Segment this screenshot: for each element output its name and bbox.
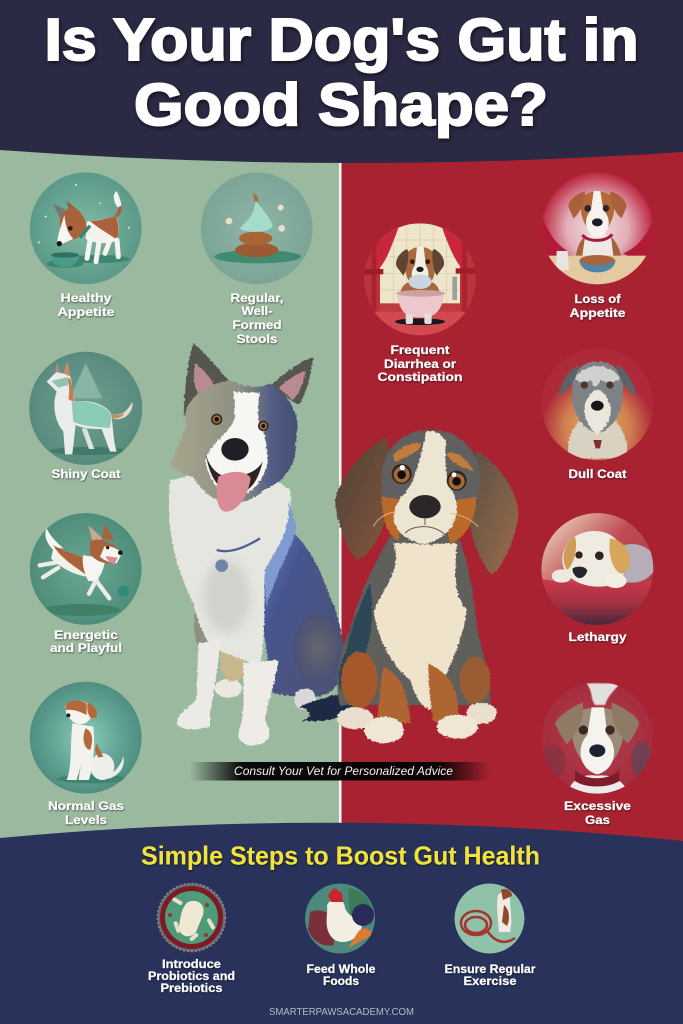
healthy dog illustration [169, 343, 343, 745]
sad dog face details [373, 464, 478, 535]
label: probiotics [148, 959, 235, 995]
label: regular stools [230, 293, 284, 346]
label: lethargy: Lethargy [568, 632, 627, 644]
icon: normal gas dog [30, 682, 142, 794]
icon: well-formed stool [201, 172, 313, 284]
label: frequent diarrhea or constipation: Constipation [378, 372, 462, 384]
label: energetic and playful: and Playful [50, 643, 122, 655]
header band [0, 0, 683, 163]
icon: probiotics [158, 884, 226, 952]
icon: excessive gas dog [541, 682, 653, 798]
label: healthy appetite: Healthy [60, 293, 112, 305]
label: exercise [444, 964, 536, 988]
title: Is Your Dog's Gut in [44, 7, 638, 73]
label: healthy appetite: Appetite [58, 307, 114, 319]
panel: healthy signs background [0, 140, 340, 850]
label: healthy appetite [58, 293, 114, 319]
label: whole foods: Feed Whole [306, 964, 376, 976]
label: whole foods: Foods [323, 976, 359, 988]
label: regular stools: Regular, [230, 293, 284, 305]
label: probiotics: Probiotics and [148, 971, 235, 983]
icon: frequent diarrhea dog in tub [362, 223, 478, 338]
icon: shiny coat dog [29, 352, 142, 465]
footer band [0, 823, 683, 1024]
healthy dog face details [206, 414, 269, 572]
callout: consult your vet [190, 762, 490, 780]
website credit: SMARTERPAWSACADEMY.COM [269, 1006, 414, 1018]
label: probiotics: Prebiotics [160, 983, 222, 995]
icon: whole foods [305, 884, 375, 954]
label: normal gas levels: Normal Gas [48, 801, 124, 813]
label: regular stools: Formed [232, 320, 282, 332]
label: whole foods [306, 964, 376, 988]
label: energetic and playful: Energetic [54, 630, 119, 642]
label: excessive gas [564, 801, 631, 827]
icon: energetic dog [30, 513, 142, 625]
label: excessive gas: Gas [585, 815, 610, 827]
label: loss of appetite: Appetite [570, 308, 626, 320]
label: excessive gas: Excessive [564, 801, 631, 813]
icon: loss of appetite dog [538, 172, 658, 286]
sad dog illustration [300, 430, 518, 743]
label: exercise: Ensure Regular [444, 964, 536, 976]
label: frequent diarrhea or constipation: Diarrhea or [384, 359, 457, 371]
icon: healthy appetite dog [30, 172, 142, 284]
label: probiotics: Introduce [162, 959, 221, 971]
label: energetic and playful [50, 630, 122, 655]
title [44, 7, 638, 138]
icon: dull coat dog [543, 360, 652, 460]
label: loss of appetite: Loss of [574, 294, 621, 306]
icon: exercise leash and dog [454, 884, 524, 954]
callout: consult your vet: Consult Your Vet for Personalized Advice [234, 764, 453, 778]
label: shiny coat: Shiny Coat [52, 469, 121, 481]
label: frequent diarrhea or constipation: Frequent [390, 345, 450, 357]
panel: warning signs background [340, 140, 683, 850]
label: normal gas levels [48, 801, 124, 827]
label: regular stools: Well- [242, 306, 273, 318]
label: frequent diarrhea or constipation [378, 345, 462, 384]
label: dull coat: Dull Coat [568, 469, 627, 481]
label: normal gas levels: Levels [65, 815, 107, 827]
label: regular stools: Stools [236, 334, 278, 346]
label: exercise: Exercise [464, 976, 516, 988]
icon: lethargic dog on cushion [540, 513, 656, 627]
label: loss of appetite [570, 294, 626, 320]
title: Good Shape? [134, 72, 548, 138]
heading: simple steps: Simple Steps to Boost Gut Health [141, 840, 540, 870]
